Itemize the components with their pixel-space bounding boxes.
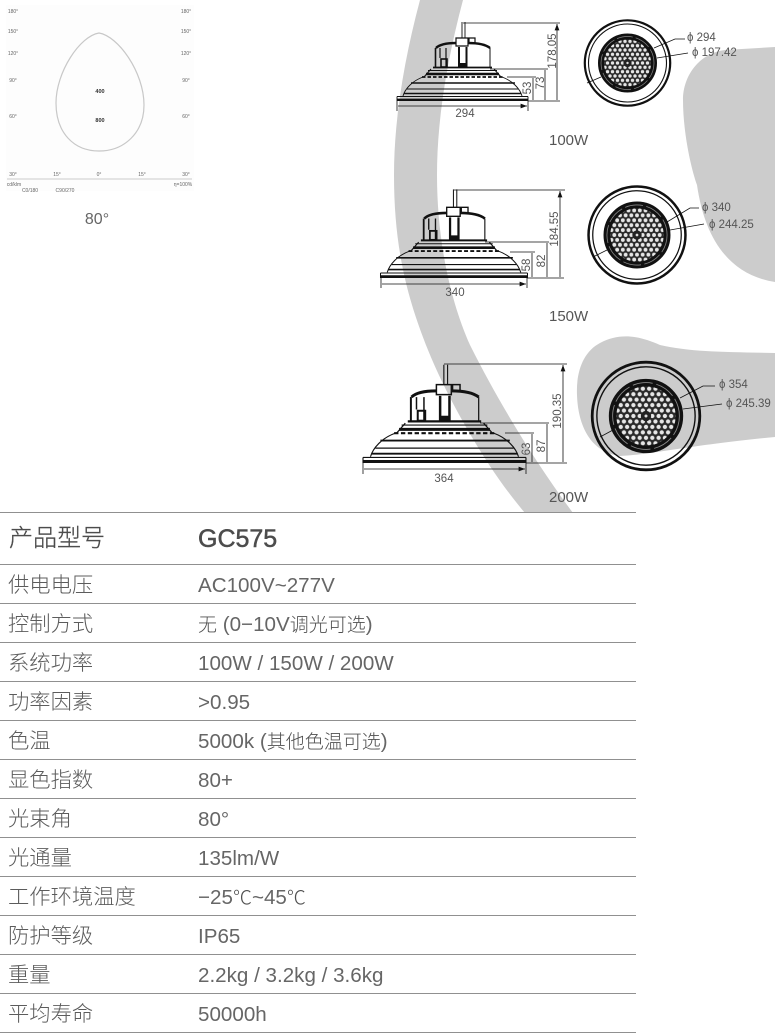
row: protection rating: IP65: [198, 925, 240, 948]
row: beam angle: [8, 807, 229, 831]
lamp 100W side view: 53: [522, 82, 534, 94]
row: colour temperature: [8, 729, 388, 753]
polar light distribution chart: C90/270: [56, 188, 75, 194]
background shape: large grey arc: [394, 0, 573, 513]
table header: product model: 产品型号: [9, 525, 105, 552]
lamp 200W side view: 63: [521, 443, 533, 455]
polar light distribution chart: 120°: [181, 51, 191, 57]
row: weight: [8, 963, 383, 987]
row: control method: 控制方式: [8, 612, 93, 636]
row: colour rendering index: 80+: [198, 769, 233, 792]
row: supply voltage: AC100V~277V: [198, 574, 335, 597]
row: luminous flux: 135lm/W: [198, 847, 279, 870]
row: system power: [8, 651, 394, 675]
lamp 150W side view: 184.55: [549, 211, 561, 247]
polar light distribution chart: C0/180: [22, 188, 38, 194]
lamp 150W dimensions: [702, 202, 754, 231]
lamp 150W side view: [380, 189, 565, 299]
polar light distribution chart: η=100%: [174, 182, 193, 188]
row: protection rating: 防护等级: [8, 924, 93, 948]
polar light distribution chart: 90°: [182, 78, 190, 84]
row: luminous flux: [8, 846, 280, 870]
row: beam angle: 80°: [198, 808, 229, 831]
lamp 150W side view: 58: [521, 259, 533, 271]
row: working temperature: [8, 885, 306, 909]
lamp 200W dimensions: [719, 379, 771, 410]
polar light distribution chart: 30°: [9, 172, 17, 178]
upper illustration area: [7, 0, 775, 512]
background shape: right blob upper: [683, 47, 775, 282]
lamp 100W dimensions: [687, 32, 737, 59]
row: system power: 系统功率: [8, 651, 93, 675]
row: control method: 无 (0−10V调光可选): [198, 613, 373, 636]
beam angle label: 80°: [85, 211, 109, 228]
lamp 100W side view: 178.05: [547, 33, 559, 69]
lamp 100W side view: 294: [455, 108, 475, 120]
polar light distribution chart: 0°: [97, 172, 101, 178]
polar light distribution chart: 60°: [9, 114, 17, 120]
lamp 150W dimensions: ϕ 244.25: [709, 219, 754, 231]
lamp 150W dimensions: ϕ 340: [702, 202, 731, 214]
label 200W: 200W: [549, 489, 589, 506]
table header: product model: GC575: [198, 525, 277, 553]
lamp 200W side view: [363, 364, 567, 485]
polar light distribution chart: 800: [95, 118, 105, 124]
row: control method: [8, 612, 373, 636]
row: colour rendering index: 显色指数: [8, 768, 93, 792]
row: working temperature: −25℃~45℃: [198, 886, 306, 909]
table header: product model: [9, 525, 277, 553]
lamp 150W side view: 340: [445, 287, 465, 299]
lamp 100W side view: 73: [535, 77, 547, 89]
specification table: [0, 512, 636, 1033]
lamp 200W side view: 190.35: [552, 393, 564, 429]
row: supply voltage: 供电电压: [8, 573, 93, 597]
polar light distribution chart: 120°: [8, 51, 18, 57]
lamp 100W dimensions: ϕ 294: [687, 32, 716, 44]
row: average lifetime: [8, 1002, 267, 1026]
row: luminous flux: 光通量: [8, 846, 72, 870]
label 100W: 100W: [549, 132, 589, 149]
row: average lifetime: 平均寿命: [8, 1002, 93, 1026]
row: colour temperature: 5000k (其他色温可选): [198, 730, 388, 753]
lamp 200W side view: 87: [536, 440, 548, 452]
row: weight: 2.2kg / 3.2kg / 3.6kg: [198, 964, 383, 987]
polar light distribution chart: 400: [95, 89, 105, 95]
polar light distribution chart: 180°: [181, 9, 191, 15]
row: power factor: 功率因素: [8, 690, 93, 714]
polar light distribution chart: [6, 5, 194, 194]
lamp 100W dimensions: ϕ 197.42: [692, 47, 737, 59]
lamp 100W side view: [397, 22, 560, 120]
row: working temperature: 工作环境温度: [8, 885, 136, 909]
polar light distribution chart: 30°: [182, 172, 190, 178]
row: power factor: >0.95: [198, 691, 250, 714]
polar light distribution chart: 60°: [182, 114, 190, 120]
row: weight: 重量: [8, 963, 51, 987]
row: system power: 100W / 150W / 200W: [198, 652, 394, 675]
row: beam angle: 光束角: [8, 807, 72, 831]
polar light distribution chart: cd/klm: [7, 182, 21, 188]
lamp 200W dimensions: ϕ 245.39: [726, 398, 771, 410]
label 150W: 150W: [549, 308, 589, 325]
row: protection rating: [8, 924, 240, 948]
row: colour rendering index: [8, 768, 233, 792]
polar light distribution chart: 180°: [8, 9, 18, 15]
polar light distribution chart: 15°: [53, 172, 61, 178]
row: supply voltage: [8, 573, 335, 597]
row: colour temperature: 色温: [8, 729, 51, 753]
lamp 100W top view: [585, 20, 688, 106]
polar light distribution chart: 90°: [9, 78, 17, 84]
row: power factor: [8, 690, 250, 714]
polar light distribution chart: 15°: [138, 172, 146, 178]
lamp 150W side view: 82: [536, 255, 548, 267]
polar light distribution chart: 150°: [8, 29, 18, 35]
polar light distribution chart: 150°: [181, 29, 191, 35]
background shape: right blob lower: [577, 336, 775, 456]
lamp 200W dimensions: ϕ 354: [719, 379, 748, 391]
row: average lifetime: 50000h: [198, 1003, 267, 1026]
lamp 200W side view: 364: [434, 473, 454, 485]
lamp 150W top view: [589, 187, 704, 283]
lamp 200W top view: [592, 362, 722, 470]
